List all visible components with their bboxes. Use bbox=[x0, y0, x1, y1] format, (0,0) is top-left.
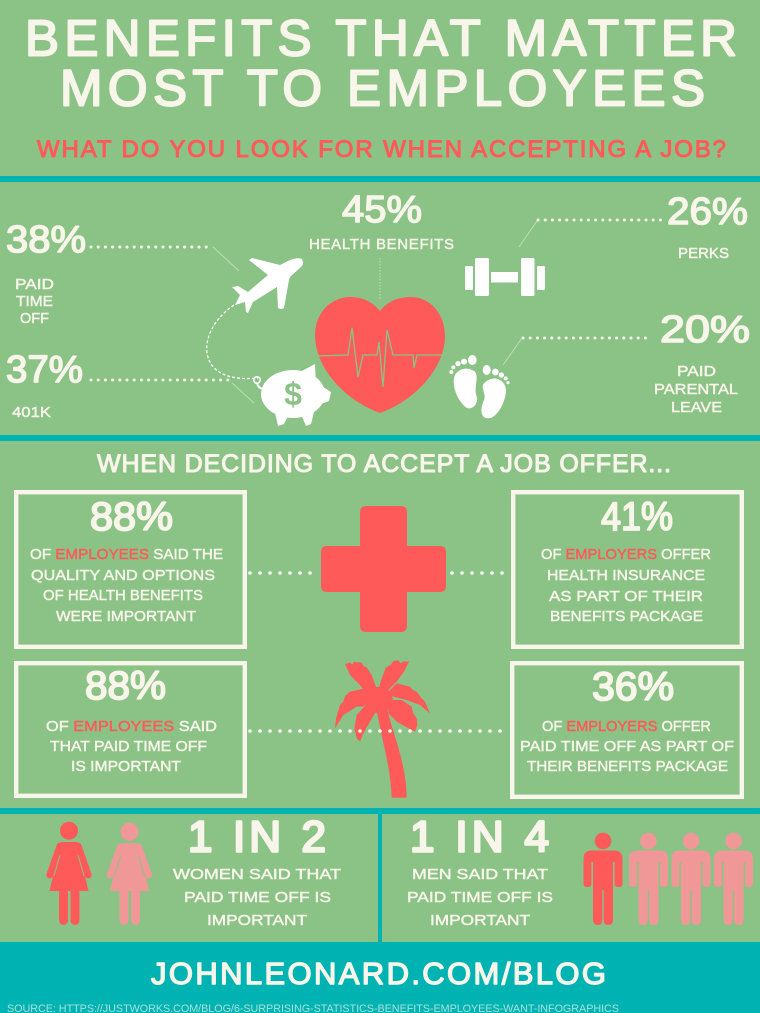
icon: dumbbell bbox=[465, 258, 545, 296]
stat: 1 in 2 women bbox=[173, 812, 341, 929]
stat: 1 in 2 women: WOMEN SAID THAT bbox=[173, 866, 341, 883]
panel: 41% employers health insurance bbox=[513, 492, 742, 647]
stat: 20% paid parental leave bbox=[654, 309, 750, 416]
man highlighted bbox=[584, 833, 622, 925]
panel: 88% employees health benefits: 88% bbox=[90, 495, 173, 539]
panel: 36% employers paid time off: PAID TIME OFF AS PART OF bbox=[520, 738, 734, 755]
stat: 1 in 2 women: IMPORTANT bbox=[207, 912, 307, 929]
footer band bbox=[0, 942, 760, 1013]
title: MOST TO EMPLOYEES bbox=[60, 60, 705, 116]
icon: palm tree bbox=[335, 660, 430, 798]
stat: 1 in 2 women: PAID TIME OFF IS bbox=[184, 889, 331, 906]
panel: 41% employers health insurance: 41% bbox=[601, 495, 673, 539]
stat: 20% paid parental leave: PAID bbox=[677, 363, 716, 380]
stat: 1 in 4 men: MEN SAID THAT bbox=[412, 866, 548, 883]
connector: perks bbox=[519, 220, 661, 247]
panel: 88% employees health benefits bbox=[16, 492, 245, 647]
title: BENEFITS THAT MATTER bbox=[25, 10, 737, 66]
icon: piggy bank bbox=[254, 364, 331, 426]
stat: 20% paid parental leave: PARENTAL bbox=[654, 381, 738, 398]
icon: baby feet bbox=[449, 355, 510, 418]
stat: 26% perks bbox=[667, 191, 748, 262]
panel: what employees look for bbox=[6, 189, 750, 426]
stat: 45% health benefits: 45% bbox=[342, 189, 422, 231]
panel: 36% employers paid time off: OF EMPLOYERS OFFER bbox=[542, 718, 711, 735]
panel: 88% employees paid time off: OF EMPLOYEES SAID bbox=[46, 718, 217, 735]
panel: 36% employers paid time off bbox=[512, 663, 742, 797]
stat: 37% 401k: 401K bbox=[12, 404, 51, 421]
stat: 26% perks: 26% bbox=[667, 191, 748, 233]
stat: 38% paid time off: 38% bbox=[6, 219, 86, 261]
icon: piggy bank: $ bbox=[284, 376, 302, 412]
connector: health benefits bbox=[379, 258, 381, 300]
stat: 1 in 4 men: IMPORTANT bbox=[430, 912, 530, 929]
connector: parental leave bbox=[503, 338, 646, 365]
panel: 41% employers health insurance: HEALTH INSURANCE bbox=[547, 567, 705, 584]
panel: 88% employees paid time off bbox=[16, 663, 245, 796]
woman muted bbox=[110, 823, 149, 925]
man muted 1 bbox=[629, 833, 668, 925]
panel: 41% employers health insurance: OF EMPLOYERS OFFER bbox=[541, 546, 711, 563]
panel: 88% employees paid time off: THAT PAID TIME OFF bbox=[50, 738, 207, 755]
man muted 3 bbox=[714, 833, 753, 925]
stat: 20% paid parental leave: LEAVE bbox=[671, 399, 722, 416]
stat: 37% 401k: 37% bbox=[6, 349, 83, 391]
teal divider middle bbox=[0, 435, 760, 441]
stat: 45% health benefits: HEALTH BENEFITS bbox=[309, 236, 454, 253]
connector: palm dots bbox=[250, 729, 502, 733]
footer website: JOHNLEONARD.COM/BLOG bbox=[151, 956, 606, 991]
stat: 38% paid time off bbox=[6, 219, 86, 327]
man muted 2 bbox=[672, 833, 710, 925]
icon: airplane bbox=[232, 258, 303, 313]
stat: 38% paid time off: OFF bbox=[20, 310, 49, 327]
stat: 37% 401k bbox=[6, 349, 83, 421]
panel: 88% employees health benefits: OF EMPLOYEES SAID THE bbox=[30, 546, 223, 563]
stat: 1 in 4 men bbox=[407, 812, 553, 929]
stat: 38% paid time off: PAID bbox=[15, 276, 54, 293]
panel: 36% employers paid time off: THEIR BENEFITS PACKAGE bbox=[527, 758, 728, 775]
stat: 1 in 4 men: PAID TIME OFF IS bbox=[407, 889, 553, 906]
stat: 1 in 4 men: 1 IN 4 bbox=[410, 812, 549, 862]
woman highlighted bbox=[50, 822, 88, 925]
stat: 38% paid time off: TIME bbox=[16, 293, 53, 310]
title bbox=[25, 10, 737, 116]
stat: 20% paid parental leave: 20% bbox=[660, 309, 750, 351]
panel: 88% employees health benefits: WERE IMPORTANT bbox=[56, 608, 196, 625]
panel: 88% employees paid time off: IS IMPORTANT bbox=[71, 758, 181, 775]
panel: 88% employees health benefits: OF HEALTH BENEFITS bbox=[43, 587, 203, 604]
panel: 41% employers health insurance: AS PART OF THEIR bbox=[549, 588, 703, 605]
flight path dashes bbox=[207, 305, 258, 379]
teal divider top bbox=[0, 176, 760, 182]
icon: heart with heartbeat bbox=[315, 297, 445, 413]
stat: 1 in 2 women: 1 IN 2 bbox=[188, 812, 326, 862]
teal divider vertical bbox=[378, 810, 382, 945]
panel: 36% employers paid time off: 36% bbox=[592, 665, 674, 709]
icon: two women pictogram bbox=[50, 822, 149, 925]
panel: 88% employees health benefits: QUALITY AND OPTIONS bbox=[31, 567, 215, 584]
subtitle question: WHAT DO YOU LOOK FOR WHEN ACCEPTING A JOB? bbox=[37, 136, 726, 163]
icon: four men pictogram bbox=[584, 833, 753, 925]
stat: 26% perks: PERKS bbox=[678, 245, 729, 262]
icon: medical cross bbox=[321, 506, 446, 632]
connector: paid time off bbox=[91, 247, 239, 271]
panel: 41% employers health insurance: BENEFITS PACKAGE bbox=[550, 608, 703, 625]
teal divider lower bbox=[0, 808, 760, 814]
connector: health dots bbox=[250, 571, 506, 575]
stat: 45% health benefits bbox=[309, 189, 454, 253]
panel: 88% employees paid time off: 88% bbox=[85, 664, 166, 708]
connector: 401k bbox=[91, 380, 254, 403]
heading: when deciding: WHEN DECIDING TO ACCEPT A JOB OFFER... bbox=[97, 450, 671, 478]
